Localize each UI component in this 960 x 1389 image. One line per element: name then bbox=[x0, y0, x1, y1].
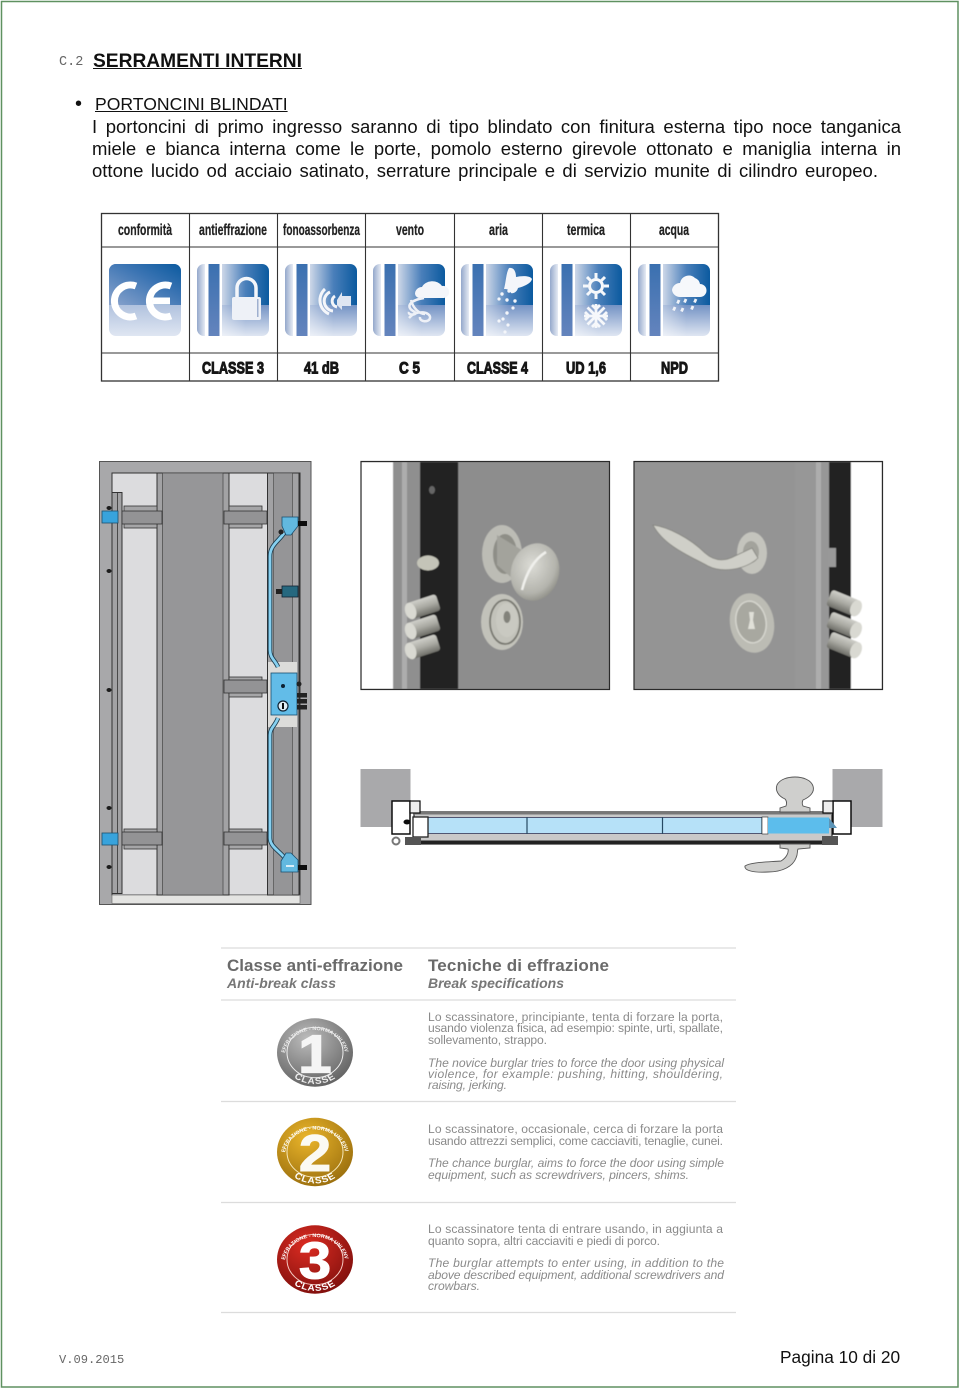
photo: handle side bbox=[634, 462, 882, 690]
icon: padlock bbox=[197, 264, 269, 336]
column headers: aria bbox=[489, 222, 508, 239]
knob bbox=[482, 525, 566, 606]
badge: class 3: CLASSE bbox=[295, 1280, 336, 1291]
door frame elevation bbox=[100, 462, 311, 904]
column headers: fonoassorbenza bbox=[283, 222, 360, 239]
icon: rain cloud bbox=[638, 264, 710, 336]
paragraph: I portoncini di primo ingresso saranno di tipo blindato con finitura esterna tipo noce tanganica bbox=[92, 116, 901, 137]
column headers: acqua bbox=[659, 222, 689, 239]
right wall bbox=[832, 769, 882, 827]
paragraph: miele e bianca interna come le porte, pomolo esterno girevole ottonato e maniglia interna in bbox=[92, 138, 901, 159]
class 1 description: The novice burglar tries to force the door using physical bbox=[428, 1056, 724, 1070]
multipoint rods bbox=[270, 533, 284, 857]
door leaf bbox=[414, 812, 832, 844]
class 2 description bbox=[428, 1122, 724, 1182]
class 3 description bbox=[428, 1222, 725, 1293]
lever handle bbox=[653, 525, 767, 574]
left jamb bbox=[392, 801, 428, 845]
footer version: V.09.2015 bbox=[59, 1353, 124, 1367]
table headers: Tecniche di effrazione bbox=[428, 956, 609, 975]
badge: class 1 bbox=[277, 1018, 353, 1087]
class 3 description: above described equipment, additional screwdrivers and bbox=[428, 1268, 725, 1282]
rating values: CLASSE 3 bbox=[202, 358, 264, 378]
right jamb bbox=[822, 801, 851, 845]
middle lock point bbox=[276, 586, 298, 597]
rating values: CLASSE 4 bbox=[467, 358, 528, 378]
class 1 description: Lo scassinatore, principiante, tenta di forzare la porta, bbox=[428, 1010, 723, 1024]
subheading: PORTONCINI BLINDATI bbox=[95, 94, 288, 114]
section number: C.2 bbox=[59, 55, 83, 70]
class 3 description: Lo scassinatore tenta di entrare usando, in aggiunta a bbox=[428, 1222, 723, 1236]
table headers bbox=[226, 956, 609, 991]
icon: CE mark bbox=[109, 264, 181, 336]
left hinges bbox=[102, 506, 118, 869]
class 2 description: equipment, such as screwdrivers, pincers, shims. bbox=[428, 1168, 689, 1182]
photo: knob side bbox=[361, 462, 610, 690]
class 2 description: The chance burglar, aims to force the door using simple bbox=[428, 1156, 724, 1170]
anti-break class table bbox=[221, 947, 736, 1314]
cylinder rosette bbox=[481, 594, 523, 650]
column headers: vento bbox=[396, 222, 424, 239]
rating values: UD 1,6 bbox=[566, 358, 606, 378]
badge: class 2: 2 bbox=[299, 1124, 331, 1182]
column headers: conformità bbox=[118, 222, 172, 239]
main lock bbox=[271, 673, 307, 715]
class 1 description: sollevamento, strappo. bbox=[428, 1033, 547, 1047]
class 1 description: raising, jerking. bbox=[428, 1078, 507, 1092]
class 2 description: Lo scassinatore, occasionale, cerca di forzare la porta bbox=[428, 1122, 723, 1136]
right stile bbox=[268, 473, 299, 895]
icon: sound bbox=[285, 264, 357, 336]
icon: sun and snowflake bbox=[550, 264, 622, 336]
class 3 description: quanto sopra, altri cacciaviti e piedi di porco. bbox=[428, 1234, 660, 1248]
deadbolts bbox=[403, 594, 441, 661]
footer page number: Pagina 10 di 20 bbox=[780, 1347, 900, 1367]
badge: class 3: ANTIEFFRAZIONE - NORMA UNI ENV 1627 bbox=[281, 1234, 349, 1260]
left wall bbox=[360, 769, 410, 827]
latch bbox=[417, 556, 439, 570]
class 3 description: crowbars. bbox=[428, 1279, 480, 1293]
left stile bbox=[112, 492, 122, 894]
bullet: • bbox=[75, 93, 82, 115]
icon: wind bbox=[373, 264, 449, 336]
upper lock point bbox=[278, 517, 307, 535]
section knob bbox=[776, 777, 813, 812]
title: SERRAMENTI INTERNI bbox=[93, 50, 302, 72]
class 1 description bbox=[428, 1010, 724, 1092]
table headers: Break specifications bbox=[428, 975, 564, 991]
badge: class 2 bbox=[277, 1118, 353, 1186]
class 2 description: usando attrezzi semplici, come cacciaviti, tenaglie, cunei. bbox=[428, 1134, 723, 1148]
badge: class 2: ANTIEFFRAZIONE - NORMA UNI ENV 1627 bbox=[281, 1126, 349, 1152]
class 1 description: violence, for example: pushing, hitting, shouldering, bbox=[428, 1067, 723, 1081]
column headers: termica bbox=[567, 222, 605, 239]
rating values bbox=[202, 358, 688, 378]
rating values: NPD bbox=[661, 358, 688, 378]
badge: class 2: CLASSE bbox=[295, 1172, 336, 1184]
door cross section bbox=[360, 769, 882, 872]
rating values: C 5 bbox=[399, 358, 420, 378]
paragraph bbox=[92, 116, 902, 181]
table headers: Anti-break class bbox=[226, 975, 336, 991]
badge: class 1: 1 bbox=[298, 1024, 332, 1085]
deadbolts bbox=[826, 589, 864, 660]
badge: class 3 bbox=[277, 1225, 353, 1294]
column headers bbox=[118, 222, 689, 239]
class 1 description: usando violenza fisica, ad esempio: spinte, urti, spallate, bbox=[428, 1021, 723, 1035]
badge: class 1: CLASSE bbox=[295, 1073, 336, 1084]
rating values: 41 dB bbox=[304, 358, 339, 378]
badge: class 1: ANTIEFFRAZIONE - NORMA UNI ENV 1627 bbox=[281, 1026, 349, 1053]
table headers: Classe anti-effrazione bbox=[227, 956, 403, 975]
central panel bbox=[157, 473, 229, 895]
keyhole rosette bbox=[725, 590, 779, 656]
lower lock point bbox=[281, 853, 307, 872]
column headers: antieffrazione bbox=[199, 222, 267, 239]
horizontal braces bbox=[122, 506, 267, 849]
icon: butterfly and air dots bbox=[461, 264, 533, 336]
paragraph: ottone lucido od acciaio satinato, serrature principale e di servizio munite di cilindro europeo. bbox=[92, 160, 878, 181]
section handle bbox=[745, 844, 810, 872]
class 3 description: The burglar attempts to enter using, in addition to the bbox=[428, 1256, 724, 1270]
badge: class 3: 3 bbox=[299, 1231, 331, 1290]
performance table bbox=[101, 213, 719, 381]
